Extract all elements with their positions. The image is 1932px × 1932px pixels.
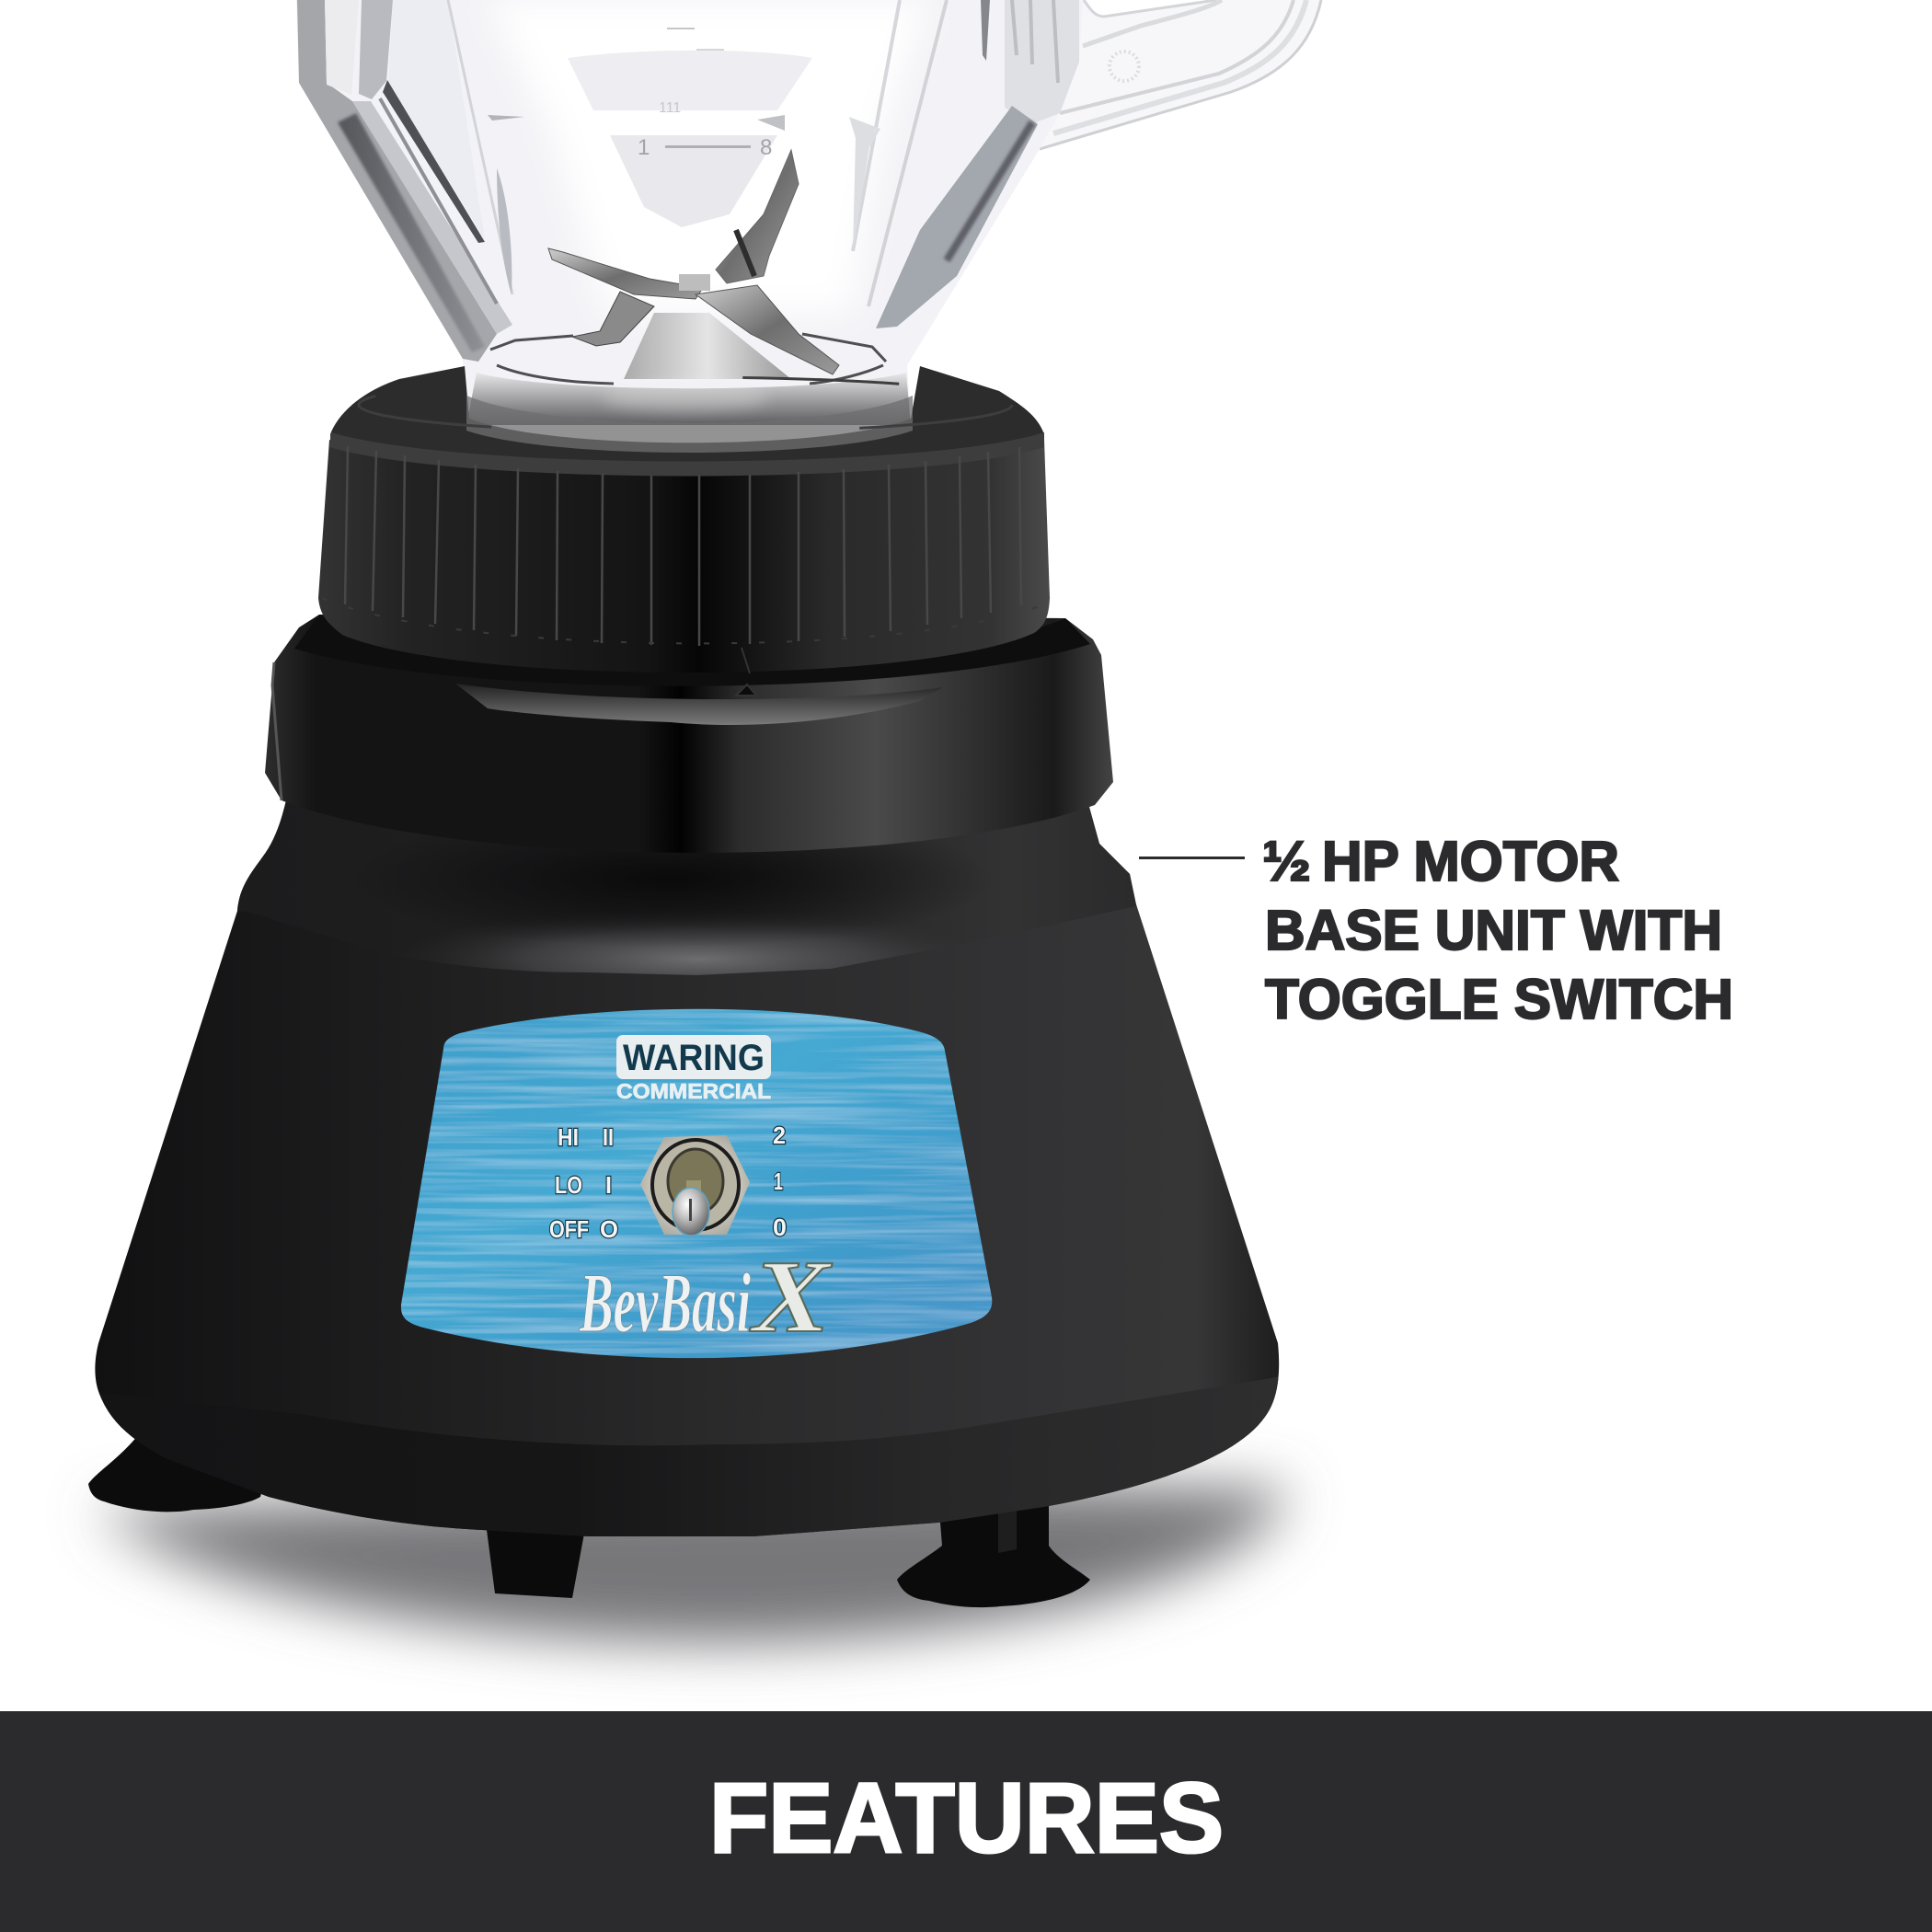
footer banner xyxy=(0,1711,1932,1932)
callout: motor base xyxy=(1139,830,1733,1030)
glass jar xyxy=(296,0,1321,425)
switch position labels xyxy=(549,1121,787,1243)
switch position labels: II xyxy=(603,1123,614,1151)
switch position labels: O xyxy=(600,1215,618,1243)
jar measure marks: 1 xyxy=(638,135,650,160)
base body xyxy=(95,800,1279,1536)
jar neck xyxy=(466,373,911,425)
black locking ring xyxy=(318,366,1050,696)
jar left facets xyxy=(297,0,524,362)
ring rib lower edge xyxy=(322,598,1049,643)
toggle switch xyxy=(640,1135,750,1236)
measuring panels xyxy=(568,28,812,227)
callout text: HP MOTOR xyxy=(1322,830,1619,892)
plate background xyxy=(401,1009,992,1358)
Waring logo xyxy=(616,1035,771,1103)
switch position labels: HI xyxy=(558,1123,579,1151)
switch position labels: LO xyxy=(555,1171,582,1199)
Waring logo: COMMERCIAL xyxy=(616,1079,771,1103)
collar gap under ring xyxy=(294,615,1090,686)
ring top rim xyxy=(330,366,1044,469)
callout text: BASE UNIT WITH xyxy=(1265,899,1722,961)
blender product illustration xyxy=(87,0,1321,1607)
footer heading: FEATURES xyxy=(709,1762,1224,1873)
callout text xyxy=(1262,830,1733,1030)
floor shadow under blender xyxy=(97,1485,1288,1642)
measuring panels: 111 xyxy=(659,100,681,116)
middle leg xyxy=(484,1509,589,1598)
blade assembly xyxy=(548,150,839,374)
base upper shoulder xyxy=(237,802,1136,975)
motor base xyxy=(87,791,1288,1607)
switch position labels: 1 xyxy=(774,1167,783,1195)
callout text: TOGGLE SWITCH xyxy=(1265,968,1733,1030)
handle window xyxy=(1084,0,1216,17)
right foot xyxy=(897,1500,1090,1607)
base lower skirt xyxy=(99,1376,1279,1536)
ring alignment notch xyxy=(736,648,756,696)
right foot stem highlight xyxy=(998,1509,1017,1553)
control nameplate xyxy=(401,1009,992,1358)
callout text: ½ xyxy=(1262,830,1311,892)
jar right facets xyxy=(757,0,1079,328)
BevBasiX logo: BevBasi xyxy=(579,1256,751,1350)
ring body xyxy=(318,440,1050,673)
callout leader line xyxy=(1139,857,1245,859)
switch position labels: 2 xyxy=(773,1121,786,1149)
BevBasiX logo: X xyxy=(750,1240,833,1354)
collar reflection xyxy=(455,684,943,725)
switch position labels: OFF xyxy=(549,1215,589,1243)
measuring panels: 8 xyxy=(760,135,772,160)
jar floor ring xyxy=(490,334,886,384)
jar handle xyxy=(1040,0,1321,149)
centre reflection highlight xyxy=(488,0,929,313)
ring translucent shoulder xyxy=(329,432,1044,477)
ring ribs xyxy=(345,446,1021,646)
jar base highlight through ring xyxy=(603,383,768,412)
Waring logo: WARING xyxy=(623,1038,765,1078)
switch position labels: I xyxy=(605,1171,612,1199)
glossy collar band xyxy=(265,615,1113,853)
jar body xyxy=(296,0,1083,419)
central blade cone xyxy=(624,313,791,379)
switch position labels: 0 xyxy=(773,1213,787,1241)
left foot xyxy=(88,1435,276,1512)
